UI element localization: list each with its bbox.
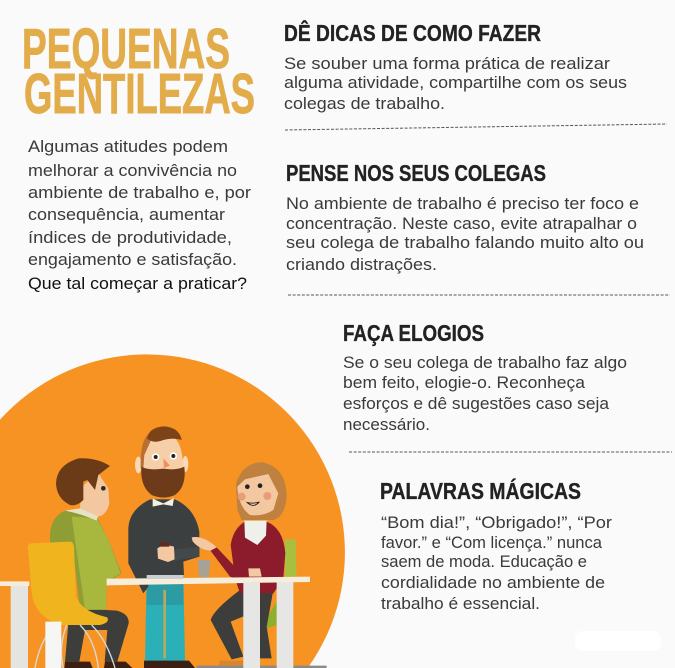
intro text: ambiente de trabalho e, por	[28, 183, 251, 202]
text: faça elogios: necessário.	[343, 415, 430, 434]
text: palavras mágicas: cordialidade no ambiente de	[381, 573, 605, 592]
intro text: melhorar a convivência no	[28, 161, 237, 180]
text: palavras mágicas	[381, 513, 612, 613]
text: faça elogios: Se o seu colega de trabalho faz algo	[343, 353, 627, 372]
text: palavras mágicas: saem de moda. Educação e	[381, 552, 587, 571]
text: pense nos seus colegas: concentração. Neste caso, evite atrapalhar o	[286, 214, 637, 233]
intro text	[28, 137, 251, 293]
person: man in green sweater	[50, 458, 132, 668]
panel: palavras mágicas	[380, 477, 612, 613]
text: palavras mágicas: “Bom dia!”, “Obrigado!”, “Por	[381, 513, 612, 532]
floor strip	[197, 666, 327, 668]
text: faça elogios: esforços e dê sugestões caso seja	[343, 394, 610, 413]
text: dê dicas: alguma atividade, compartilhe com os seus	[284, 73, 627, 92]
title: GENTILEZAS	[24, 62, 255, 126]
text: pense nos seus colegas	[286, 194, 644, 274]
heading: palavras mágicas: PALAVRAS MÁGICAS	[380, 477, 581, 504]
intro text: Algumas atitudes podem	[28, 137, 228, 156]
intro text: Que tal começar a praticar?	[28, 274, 247, 293]
text: dê dicas: colegas de trabalho.	[284, 94, 445, 113]
intro text: engajamento e satisfação.	[28, 250, 237, 269]
heading: dê dicas: DÊ DICAS DE COMO FAZER	[284, 19, 541, 46]
heading: faça elogios: FAÇA ELOGIOS	[343, 320, 484, 346]
person: woman in red	[192, 462, 297, 666]
intro text: consequência, aumentar	[28, 205, 225, 224]
white smudge	[575, 631, 661, 651]
table	[0, 575, 310, 668]
illustration: colleagues at a table	[0, 354, 345, 668]
orange circle	[0, 354, 345, 668]
text: dê dicas	[284, 54, 627, 113]
panel: faça elogios	[343, 320, 627, 434]
text: faça elogios	[343, 353, 627, 434]
text: faça elogios: bem feito, elogie-o. Reconheça	[343, 373, 586, 392]
text: pense nos seus colegas: criando distrações.	[286, 255, 437, 274]
text: pense nos seus colegas: No ambiente de trabalho é preciso ter foco e	[286, 194, 639, 213]
person: bearded man	[128, 426, 199, 668]
text: palavras mágicas: favor.” e “Com licença.” nunca	[381, 533, 603, 552]
panel: dê dicas	[284, 19, 627, 113]
panel: pense nos seus colegas	[286, 160, 644, 274]
heading: pense nos seus colegas: PENSE NOS SEUS COLEGAS	[286, 160, 546, 186]
title: PEQUENAS	[22, 17, 230, 81]
text: palavras mágicas: trabalho é essencial.	[381, 594, 540, 613]
coffee cup	[198, 560, 210, 577]
intro text: índices de produtividade,	[28, 228, 232, 247]
yellow chair	[28, 542, 115, 668]
text: pense nos seus colegas: seu colega de trabalho falando muito alto ou	[286, 233, 644, 252]
text: dê dicas: Se souber uma forma prática de realizar	[284, 54, 610, 73]
title	[22, 17, 255, 126]
